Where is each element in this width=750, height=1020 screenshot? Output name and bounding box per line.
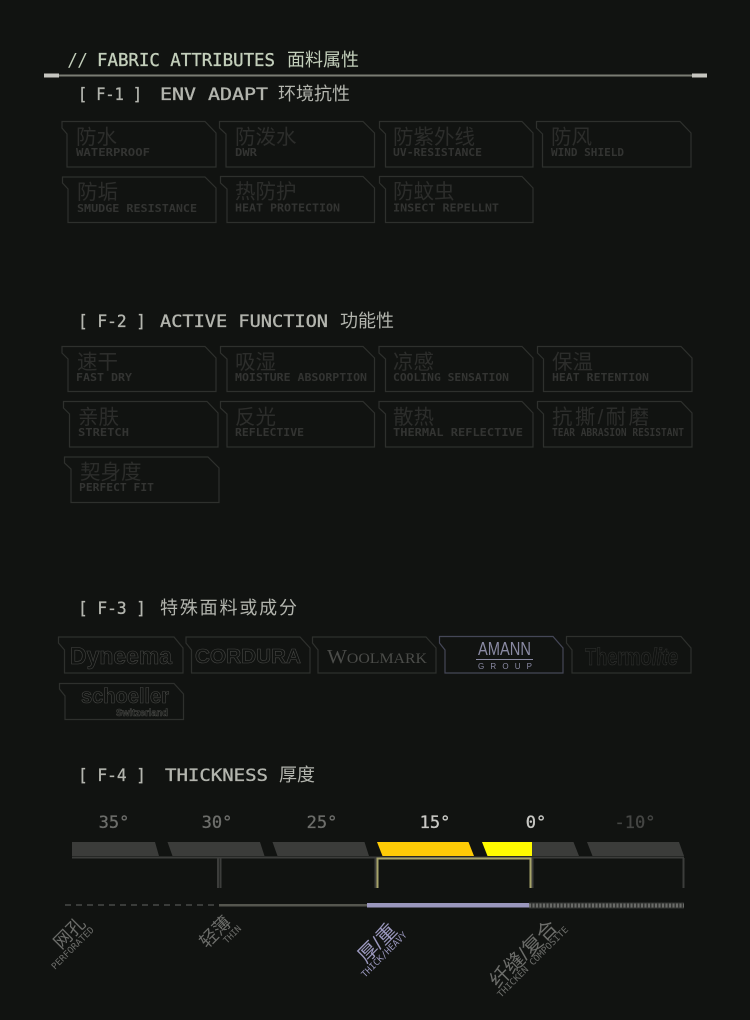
logo: Schoeller: schoeller <box>81 685 169 708</box>
label: thick/heavy: 厚/重 <box>353 919 402 968</box>
label: thicken composite: THICKEN COMPOSITE <box>496 925 571 1000</box>
heading: F-4: 厚度 <box>279 765 315 785</box>
tag: insect repellent: INSECT REPELLNT <box>393 202 499 214</box>
tag: DWR: DWR <box>235 147 258 159</box>
tag: wind shield: 防风 <box>551 126 592 149</box>
logo: Amann Group <box>440 636 563 673</box>
tag: moisture absorption: MOISTURE ABSORPTION <box>235 372 367 384</box>
tag: DWR <box>220 122 374 167</box>
temperature labels: 0° <box>526 813 546 833</box>
tag: insect repellent <box>380 176 533 222</box>
logo: Thermolite <box>566 636 691 673</box>
tag: DWR: 防泼水 <box>235 126 296 149</box>
panel: F-2 tags <box>62 346 692 502</box>
label: thin: THIN <box>222 924 244 946</box>
tag: heat protection: 热防护 <box>235 180 296 204</box>
tag: stretch: STRETCH <box>78 427 129 439</box>
tag: UV resistance <box>380 122 533 167</box>
label: perforated: 网孔 <box>50 913 89 953</box>
logo: Cordura: CORDURA <box>195 646 301 668</box>
heading: F-2 <box>78 311 394 332</box>
heading: F-4 <box>78 765 315 786</box>
heading: F-2: 功能性 <box>340 311 394 331</box>
heading: F-3 <box>78 598 297 619</box>
heading: F-3: [ F-3 ] <box>78 599 146 619</box>
tag: tear abrasion resistant: TEAR ABRASION RESISTANT <box>552 427 684 439</box>
heading: F-2: [ F-2 ] <box>78 312 146 332</box>
heading: F-1: [ F-1 ] <box>78 85 142 105</box>
temperature labels: 15° <box>420 813 450 833</box>
heading: F-2: ACTIVE FUNCTION <box>160 312 328 332</box>
temperature labels: -10° <box>615 813 655 833</box>
tag: insect repellent: 防蚊虫 <box>393 180 454 204</box>
tag: cooling sensation <box>379 346 533 392</box>
tag: smudge resistance: SMUDGE RESISTANCE <box>77 203 197 215</box>
temperature labels: 30° <box>202 813 232 833</box>
tag: waterproof: WATERPROOF <box>76 147 150 159</box>
tag: UV resistance: 防紫外线 <box>393 126 475 149</box>
chart: thickness and temperature scale <box>65 813 684 908</box>
panel: F-3 brand logos <box>58 636 691 720</box>
tag: perfect fit: PERFECT FIT <box>79 482 154 494</box>
tag: heat protection: HEAT PROTECTION <box>235 202 340 214</box>
tag: heat retention: HEAT RETENTION <box>552 372 649 384</box>
tag: reflective: 反光 <box>235 406 276 429</box>
tag: reflective: REFLECTIVE <box>235 427 304 439</box>
tag: fast dry: FAST DRY <box>76 372 133 384</box>
tag: perfect fit: 契身度 <box>80 461 142 484</box>
tag: stretch: 亲肤 <box>78 406 119 429</box>
label: thick/heavy <box>353 919 410 980</box>
heading: F-1: ENV ADAPT <box>160 85 268 105</box>
heading: F-4: [ F-4 ] <box>78 766 146 786</box>
label: thicken composite: 纤缝/复合 <box>485 916 562 993</box>
tag: UV resistance: UV-RESISTANCE <box>393 147 482 159</box>
logo: Woolmark <box>312 637 436 673</box>
tag: cooling sensation: COOLING SENSATION <box>393 372 509 384</box>
heading: F-1 <box>78 84 350 105</box>
tag: perfect fit <box>64 457 219 502</box>
temperature labels <box>99 813 655 833</box>
range brackets <box>72 858 684 888</box>
tag: waterproof <box>62 122 216 167</box>
tag: heat retention: 保温 <box>552 351 593 374</box>
tag: reflective <box>220 402 374 447</box>
label: thick/heavy: THICK/HEAVY <box>360 930 410 980</box>
title: FABRIC ATTRIBUTES <box>97 50 275 71</box>
tag: thermal reflective: 散热 <box>393 406 434 429</box>
heading: F-1: 环境抗性 <box>278 84 350 104</box>
tag: stretch <box>64 402 218 447</box>
logo: Schoeller <box>60 684 184 720</box>
heading: F-3: 特殊面料或成分 <box>160 598 297 618</box>
logo: Schoeller: Switzerland <box>116 708 168 719</box>
tag: smudge resistance: 防垢 <box>77 181 118 204</box>
logo: Woolmark: WOOLMARK <box>327 646 427 668</box>
tag: tear abrasion resistant <box>538 402 692 447</box>
label: perforated: PERFORATED <box>50 925 97 972</box>
title: // <box>68 50 88 71</box>
temperature labels: 35° <box>99 813 129 833</box>
logo: Thermolite: Thermolite <box>585 644 678 671</box>
title <box>44 50 707 78</box>
tag: tear abrasion resistant: 抗撕/耐磨 <box>552 406 649 429</box>
tag: heat retention <box>538 346 692 392</box>
logo: Dyneema <box>58 637 183 673</box>
tag: smudge resistance <box>62 177 216 222</box>
label: thin: 轻薄 <box>196 912 235 952</box>
temperature bars <box>72 842 684 856</box>
tag: thermal reflective <box>379 402 533 447</box>
title: 面料属性 <box>287 50 359 70</box>
tag: wind shield <box>536 122 691 167</box>
logo: Amann Group: AMANN <box>478 639 531 659</box>
panel: F-1 tags <box>62 122 691 222</box>
tag: heat protection <box>220 176 374 222</box>
heading: F-4: THICKNESS <box>165 766 268 786</box>
logo: Cordura <box>186 637 310 673</box>
logo: Dyneema: Dyneema <box>70 643 173 670</box>
temperature labels: 25° <box>307 813 337 833</box>
tag: thermal reflective: THERMAL REFLECTIVE <box>393 427 523 439</box>
tag: cooling sensation: 凉感 <box>393 351 434 374</box>
tag: fast dry <box>62 346 216 392</box>
logo: Amann Group: GROUP <box>478 662 532 671</box>
tag: moisture absorption: 吸湿 <box>235 351 276 374</box>
tag: fast dry: 速干 <box>77 351 118 374</box>
tag: waterproof: 防水 <box>76 126 117 149</box>
thickness line <box>65 902 684 908</box>
tag: moisture absorption <box>220 346 374 392</box>
tag: wind shield: WIND SHIELD <box>551 147 624 159</box>
